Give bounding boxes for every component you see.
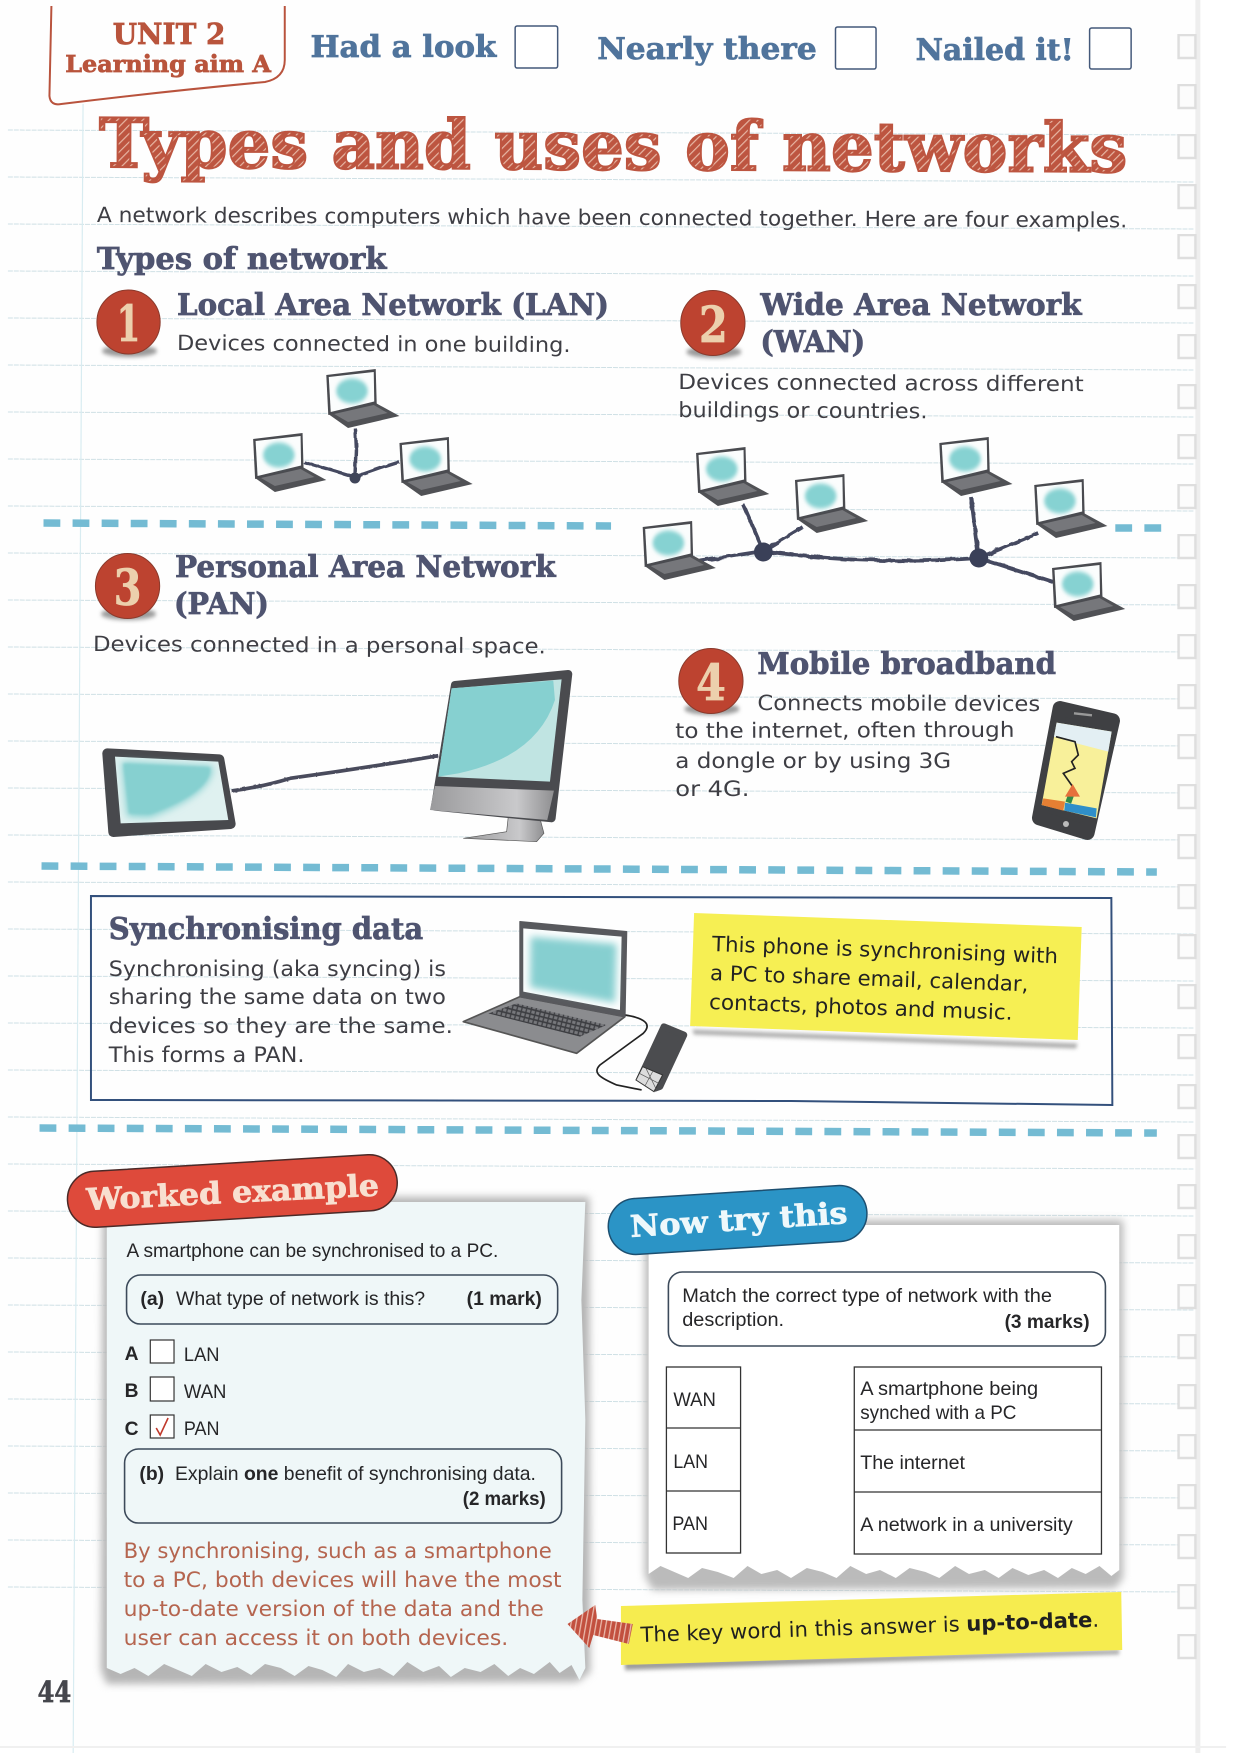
instruction box: (3 marks) [1005, 1311, 1090, 1333]
question a: (a) [140, 1288, 164, 1310]
panel: now try this [645, 1220, 1123, 1590]
PAN heading: Personal Area Network [175, 550, 557, 585]
descriptions table: A network in a university [860, 1514, 1073, 1536]
LAN heading: Local Area Network (LAN) [177, 288, 609, 323]
mobile description: or 4G. [675, 777, 749, 801]
intro text: A network describes computers which have been connected together. Here are four examples. [97, 203, 1127, 232]
badge 4 [679, 648, 743, 715]
WAN heading: (WAN) [760, 325, 865, 360]
worked example pill: Worked example [85, 1168, 380, 1218]
badge 1: 1 [117, 294, 140, 353]
yellow note: This phone is synchronising with [711, 932, 1058, 968]
key word note [621, 1592, 1122, 1670]
instruction box: description. [682, 1309, 784, 1331]
WAN heading [759, 288, 1083, 360]
badge 2 [681, 290, 745, 358]
badge 2: 2 [699, 295, 728, 354]
now try this pill: Now try this [629, 1196, 848, 1245]
mobile description [675, 691, 1040, 801]
WAN description: buildings or countries. [678, 398, 928, 423]
now try this pill [607, 1184, 869, 1256]
WAN heading: Wide Area Network [759, 288, 1083, 323]
badge 1 [97, 290, 160, 357]
badge 4: 4 [696, 653, 726, 712]
unit tab: Learning aim A [65, 52, 271, 78]
yellow note: contacts, photos and music. [709, 990, 1013, 1025]
descriptions table: The internet [860, 1452, 966, 1474]
handwritten answer [124, 1539, 562, 1650]
heading: types of network: Types of network [97, 242, 388, 277]
icon: laptop and phone connected by cable [463, 922, 684, 1092]
question b: (2 marks) [463, 1488, 546, 1510]
answer options: WAN [184, 1381, 226, 1403]
mobile description: a dongle or by using 3G [675, 749, 951, 773]
panel: mobile broadband [675, 647, 1113, 833]
descriptions table: synched with a PC [860, 1402, 1016, 1424]
panel: WAN [643, 288, 1125, 621]
progress checkboxes: Nearly there [597, 32, 817, 67]
question a: (1 mark) [467, 1288, 542, 1310]
answer options: B [125, 1380, 139, 1402]
LAN diagram [253, 369, 473, 496]
worked example pill [66, 1153, 399, 1229]
network types table: LAN [673, 1451, 708, 1473]
badge 3: 3 [114, 558, 141, 617]
tablet [107, 753, 231, 832]
unit tab: UNIT 2 [113, 17, 225, 51]
PAN diagram: tablet, cable and desktop computer [107, 674, 568, 842]
yellow note [690, 913, 1082, 1048]
LAN description: Devices connected in one building. [177, 331, 571, 357]
icon: tick [156, 1418, 168, 1435]
answer options [125, 1340, 226, 1440]
question b: Explain one benefit of synchronising data. [175, 1463, 536, 1485]
network types table: PAN [672, 1513, 708, 1535]
unit tab [49, 6, 285, 104]
sync description: devices so they are the same. [109, 1014, 453, 1038]
WAN description [678, 370, 1084, 423]
question b [125, 1449, 562, 1523]
answer options: PAN [184, 1418, 220, 1440]
answer options: LAN [184, 1344, 220, 1366]
sync heading: Synchronising data [109, 912, 423, 947]
network types table [666, 1367, 741, 1553]
yellow note: a PC to share email, calendar, [710, 961, 1029, 996]
mobile heading: Mobile broadband [757, 647, 1056, 682]
worked example intro: A smartphone can be synchronised to a PC. [127, 1240, 498, 1262]
sync description [108, 957, 453, 1067]
answer options: C [125, 1418, 139, 1440]
handwritten answer: up-to-date version of the data and the [124, 1597, 544, 1621]
key word note: The key word in this answer is up-to-date. [639, 1608, 1099, 1647]
descriptions table [854, 1367, 1101, 1554]
handwritten answer: to a PC, both devices will have the most [124, 1568, 562, 1592]
page number: 44 [38, 1675, 71, 1709]
handwritten answer: user can access it on both devices. [124, 1626, 508, 1650]
PAN heading: (PAN) [174, 587, 269, 622]
WAN diagram [643, 437, 1125, 621]
instruction box: Match the correct type of network with the [682, 1285, 1052, 1307]
question a [127, 1275, 558, 1324]
PAN description: Devices connected in a personal space. [93, 632, 546, 658]
desktop monitor [430, 674, 568, 842]
title: Types and uses of networks [99, 104, 1127, 188]
network types table: WAN [673, 1389, 716, 1411]
progress checkboxes: Nailed it! [916, 33, 1074, 68]
handwritten answer: By synchronising, such as a smartphone [124, 1539, 552, 1563]
WAN description: Devices connected across different [678, 370, 1084, 396]
mobile description: to the internet, often through [675, 718, 1014, 743]
question a: What type of network is this? [176, 1288, 425, 1310]
icon: smartphone with map [1039, 708, 1113, 833]
PAN heading [174, 550, 557, 622]
sync description: Synchronising (aka syncing) is [109, 957, 446, 981]
descriptions table: A smartphone being [860, 1378, 1038, 1400]
badge 3 [95, 554, 160, 620]
sync description: sharing the same data on two [109, 985, 446, 1009]
instruction box [668, 1272, 1105, 1346]
panel: synchronising data [91, 896, 1112, 1105]
panel: PAN [93, 550, 568, 842]
progress checkboxes [310, 26, 1131, 69]
answer options: A [125, 1343, 139, 1365]
question b: (b) [139, 1463, 164, 1485]
progress checkboxes: Had a look [310, 30, 498, 65]
sync description: This forms a PAN. [108, 1043, 305, 1067]
mobile description: Connects mobile devices [757, 691, 1040, 716]
arrow [568, 1605, 633, 1648]
panel: worked example [101, 1197, 590, 1684]
panel: LAN [97, 288, 609, 496]
